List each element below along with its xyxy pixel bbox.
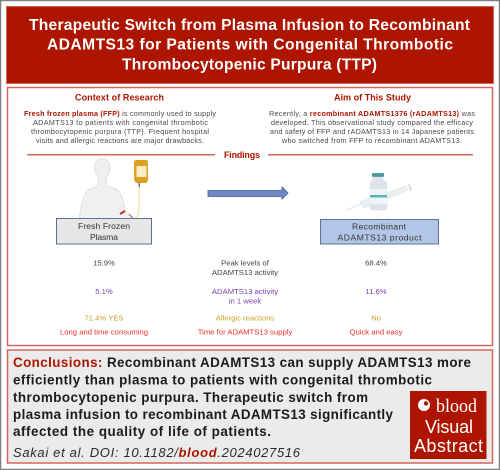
row: activity in 1 week xyxy=(95,287,387,306)
row: allergic reactions: 71.4% YES xyxy=(84,314,124,322)
context of research: Context of Research xyxy=(75,92,164,102)
context of research: thrombocytopenic purpura (TTP). Frequent hospital xyxy=(31,127,209,136)
context of research: visits and allergic reactions are major drawbacks. xyxy=(36,136,204,145)
panel: conclusions: plasma infusion to recombinant ADAMTS13 significantly xyxy=(13,407,394,422)
aim of this study: and safety of FFP and rADAMTS13 in 14 Japanese patients xyxy=(270,127,474,136)
context of research: ADAMTS13 to patients with congenital thrombotic xyxy=(33,118,208,127)
title banner: ADAMTS13 for Patients with Congenital Thrombotic xyxy=(47,36,453,54)
row: allergic reactions: Allergic reactions xyxy=(216,314,274,322)
panel: conclusions: affected the quality of life of patients. xyxy=(13,424,271,439)
icon: patient with plasma bag xyxy=(79,159,148,219)
row: peak levels: 15.9% xyxy=(93,258,115,268)
panel: conclusions xyxy=(8,350,492,463)
aim of this study: Recently, a recombinant ADAMTS1376 (rADAMTS13) was xyxy=(269,109,475,118)
citation: Sakai et al. DOI: 10.1182/blood.2024027516 xyxy=(13,445,301,460)
box: fresh frozen plasma xyxy=(56,218,152,244)
row: peak levels xyxy=(93,258,387,277)
panel: conclusions: Conclusions: Recombinant ADAMTS13 can supply ADAMTS13 more xyxy=(13,355,471,370)
row: time for supply: Time for ADAMTS13 supply xyxy=(198,328,292,336)
row: activity in 1 week: 11.6% xyxy=(365,287,387,296)
panel: conclusions: efficiently than plasma to patients with congenital thrombotic xyxy=(13,372,433,388)
logo: blood visual abstract xyxy=(410,391,486,459)
logo: blood visual abstract: Abstract xyxy=(414,436,483,456)
title banner: Thrombocytopenic Purpura (TTP) xyxy=(122,56,377,74)
row: peak levels: Peak levels of xyxy=(221,258,270,268)
row: activity in 1 week: ADAMTS13 activity xyxy=(212,287,278,296)
icon: vial and syringe xyxy=(346,173,411,210)
context of research: Fresh frozen plasma (FFP) is commonly used to supply xyxy=(24,109,216,118)
logo: blood visual abstract: Visual xyxy=(425,417,473,437)
row: activity in 1 week: in 1 week xyxy=(229,296,261,306)
aim of this study: Aim of This Study xyxy=(334,92,411,102)
context of research xyxy=(24,92,216,145)
row: allergic reactions xyxy=(84,314,381,322)
box: recombinant ADAMTS13 product: Recombinant xyxy=(352,222,407,232)
box: fresh frozen plasma: Plasma xyxy=(90,232,118,242)
row: time for supply: Quick and easy xyxy=(350,328,403,336)
row: time for supply xyxy=(60,328,403,336)
row: allergic reactions: No xyxy=(371,314,381,322)
arrow xyxy=(208,187,288,199)
box: recombinant ADAMTS13 product: ADAMTS13 product xyxy=(338,232,422,242)
title banner xyxy=(6,6,494,84)
logo: blood visual abstract: blood xyxy=(436,396,477,417)
aim of this study: who switched from FFP to recombinant ADAMTS13. xyxy=(281,136,462,145)
aim of this study xyxy=(269,92,475,145)
comparison table xyxy=(60,258,403,336)
panel: research and findings xyxy=(8,88,492,346)
box: fresh frozen plasma: Fresh Frozen xyxy=(78,221,130,231)
aim of this study: developed. This observational study compared the efficacy xyxy=(271,118,473,127)
row: peak levels: ADAMTS13 activity xyxy=(212,268,278,277)
panel: conclusions: thrombocytopenic purpura. Therapeutic switch from xyxy=(13,390,368,405)
row: peak levels: 68.4% xyxy=(365,258,387,268)
row: time for supply: Long and time consuming xyxy=(60,328,148,336)
findings heading: Findings xyxy=(224,150,260,160)
box: recombinant ADAMTS13 product xyxy=(320,220,438,244)
row: activity in 1 week: 5.1% xyxy=(95,287,113,296)
title banner: Therapeutic Switch from Plasma Infusion to Recombinant xyxy=(29,17,470,34)
